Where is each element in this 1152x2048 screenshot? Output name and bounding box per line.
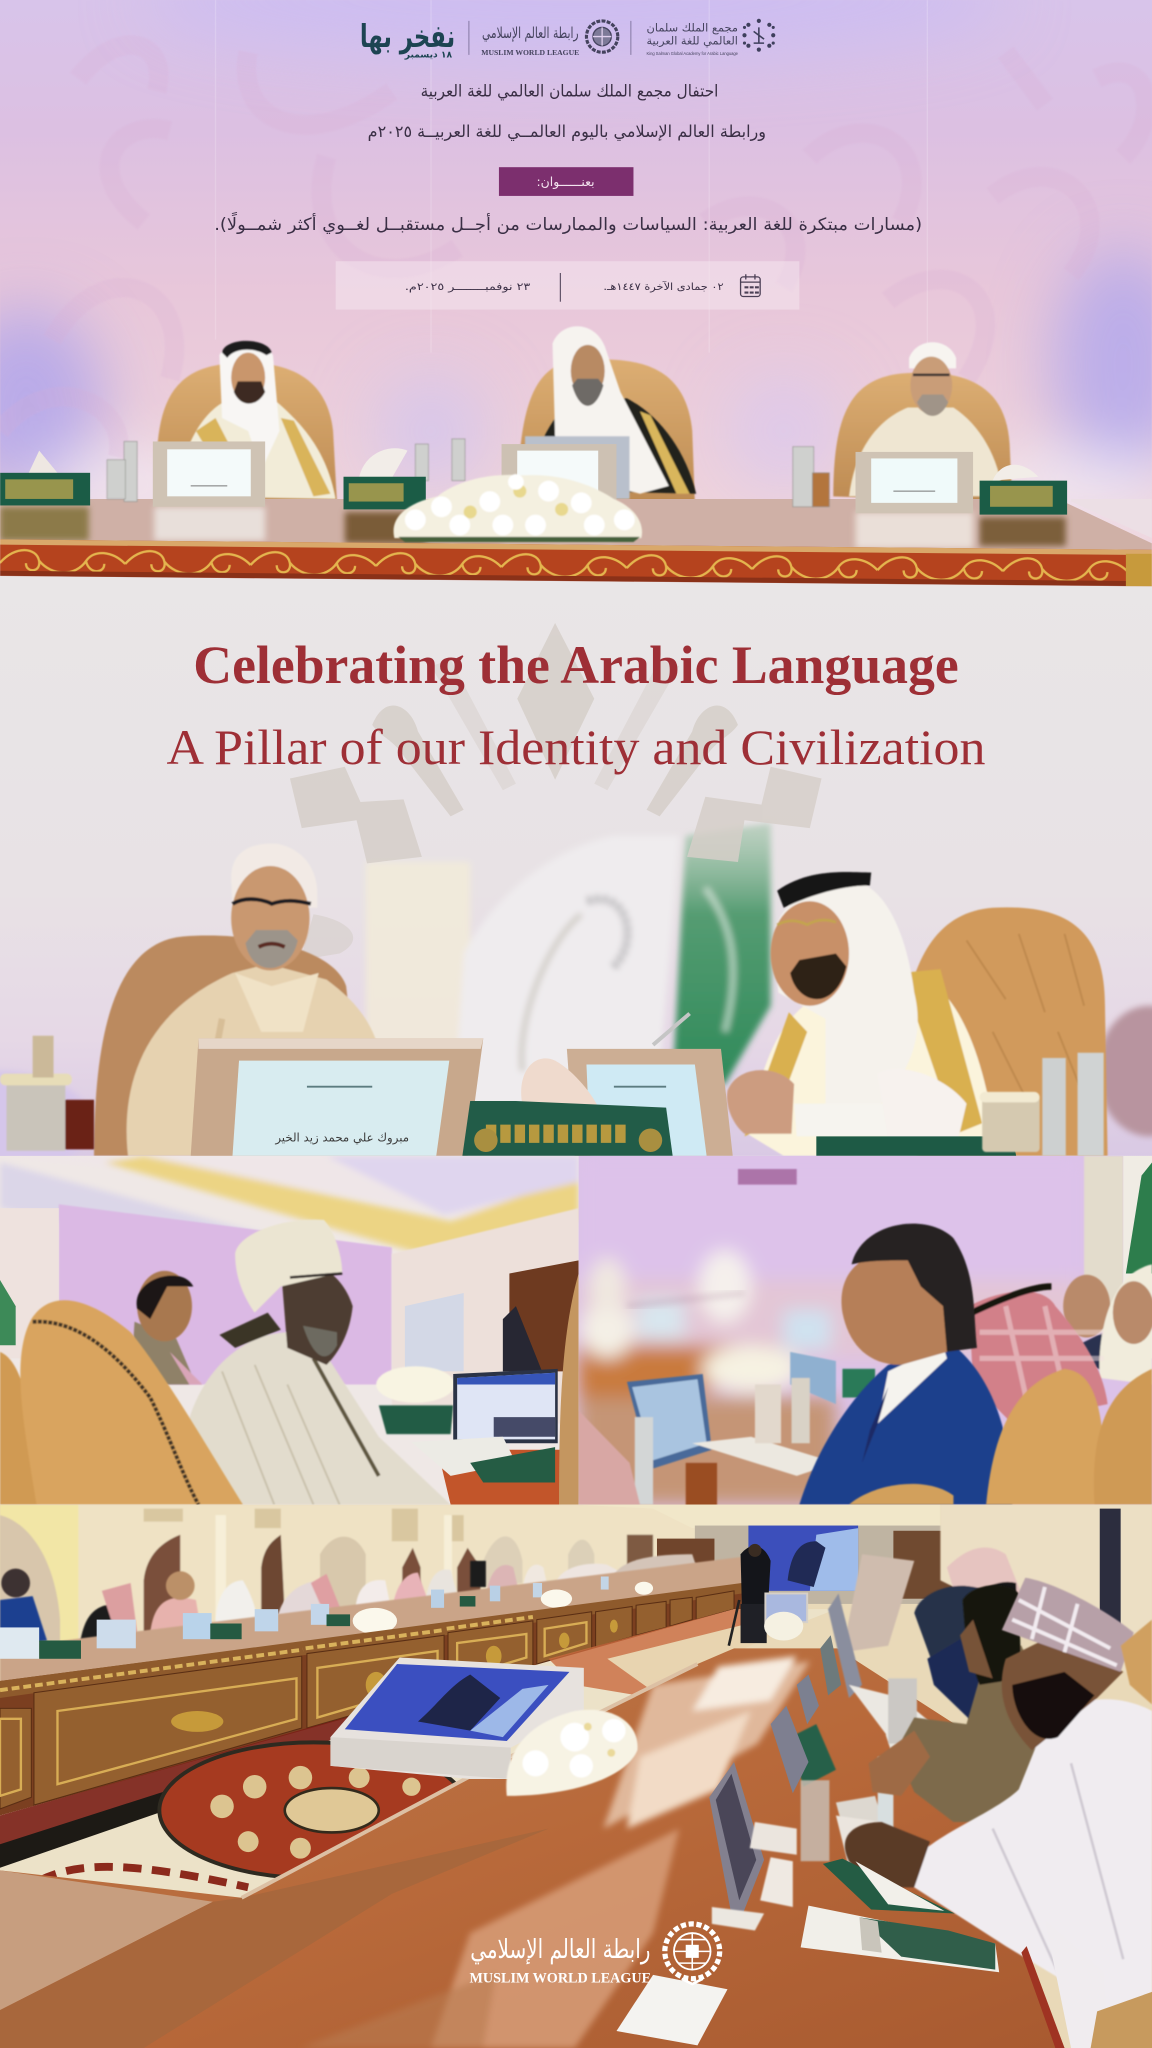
left delegates row [0,1554,699,1659]
person: man in olive suit [869,1585,1058,1822]
logo: Muslim World League: MUSLIM WORLD LEAGUE [481,48,579,57]
plaque: right [856,452,973,513]
table top reflection [0,499,1152,552]
emblem: globe and wreath [665,1924,720,1984]
heading: Arabic event line 1: احتفال مجمع الملك سلمان العالمي للغة العربية [421,82,718,102]
logo: Muslim World League [481,21,618,57]
carpet [0,1609,836,1898]
logo: King Salman Academy: مجمع الملك سلمان [647,21,738,34]
panel: title and two speakers [0,623,1152,1156]
printed papers and folder [801,1859,1152,2048]
person: man in blue suit [799,1224,1012,1505]
chairs [156,359,1012,503]
chair: foreground [0,1300,243,1505]
heading: Arabic theme line: (مسارات مبتكرة للغة العربية: السياسات والممارسات من أجــل مستقبــل لغــوي أكثر شمــولًا). [214,212,922,235]
Hijri date: ٠٢ جمادى الآخرة ١٤٤٧هـ. [603,281,724,293]
panel: photo, delegate in blue suit [579,1156,1152,1507]
flower arrangement [394,474,642,542]
tissue box: centre [344,448,426,509]
second screen and flowers [764,1593,807,1640]
logo: King Salman Academy: King Salman Global Academy for Arabic Language [647,51,739,56]
white flower arrangement [506,1710,638,1796]
logos row [360,19,775,60]
tissue box: left [0,451,90,505]
logo: King Salman Academy: العالمي للغة العربية [647,34,738,47]
right wall [940,1505,1152,1685]
foreground conference table [0,1648,1064,2048]
badge: title label: بعنــــــوان: [537,174,595,190]
Arabic league name: رابطة العالم الإسلامي [470,1935,650,1965]
tissue boxes [0,448,1067,515]
heading: Celebrating the Arabic Language: Celebrating the Arabic Language [193,635,959,695]
English league name: MUSLIM WORLD LEAGUE [470,1971,651,1987]
person: centre speaker [525,326,696,499]
logo: Muslim World League white footer [470,1924,720,1987]
flowers and green box [376,1366,455,1434]
heading: Arabic event line 2: ورابطة العالم الإسلامي باليوم العالمــي للغة العربيــة ٢٠٢٥م [368,122,766,142]
tissue box: foreground [462,1058,673,1156]
microphone [653,1014,690,1045]
ceiling [0,1156,579,1273]
table items on right row [790,1593,967,1842]
person: left delegate [176,341,336,499]
table reflections [300,1656,810,2048]
background calligraphy watermark [110,436,126,457]
presentation monitor [330,1657,584,1779]
glassware left [0,1036,94,1151]
side delegates [1063,1264,1152,1384]
person: right delegate [849,342,1003,496]
person: man in white cap and thobe [845,1578,1152,2048]
logo: campaign wordmark: ١٨ ديسمبر [404,50,452,60]
bottles and glasses [107,439,829,507]
logo: campaign wordmark [362,23,454,60]
camera operator [729,1544,771,1646]
subheading: A Pillar of our Identity and Civilization: A Pillar of our Identity and Civilization [167,720,986,775]
backdrop seams [216,0,927,353]
lilac wall [59,1204,392,1384]
plaque: left [153,441,265,507]
row of plaques and boxes [0,1576,653,1659]
person: man in white robe and turban [183,1220,451,1505]
plaque: right foreground [567,1049,733,1156]
carpet medallion [159,1742,468,1878]
tissue box: right [980,465,1067,515]
water glass and cards [712,1780,891,1930]
large video screen [748,1526,858,1591]
panel: stage photograph [0,0,1152,586]
panel: photo, delegate in turban [0,1156,579,1505]
right side crowd [842,1547,1032,1757]
date panel [336,261,799,310]
panel: conference hall photo [0,1505,1152,2048]
plaque: large foreground: مبروك علي محمد زيد الخير [274,1131,409,1146]
person: right speaker with chair [727,872,1108,1156]
blurred backdrop and room [579,1156,1081,1505]
hall walls with arches [0,1505,744,1685]
laptop [453,1369,558,1443]
laptops along the table [709,1635,841,1916]
logo: Muslim World League: رابطة العالم الإسلامي [482,24,579,43]
stage lighting glows [0,0,1152,512]
name plaques [153,441,973,513]
Gregorian date: ٢٣ نوفمبــــــــر ٢٠٢٥م. [405,282,531,293]
blurred laptops and water [579,1352,875,1507]
drapes and flags behind speakers [0,823,1152,1176]
badge: title label [499,167,633,196]
plaque: large foreground [191,1038,483,1156]
white tabletop plate [616,1975,728,2045]
person: left speaker with chair [94,844,392,1156]
red checked headdress person [969,1287,1108,1424]
gold ornaments [171,1620,618,1732]
tissue box: right foreground [816,1136,1016,1156]
logo: King Salman Academy [647,19,775,56]
background emblem watermark [290,623,822,960]
plaque: centre [502,444,616,507]
person: man behind [131,1271,202,1384]
chair back on right edge [559,1273,579,1505]
glassware right [980,1053,1104,1156]
logo: campaign wordmark: نفخر بها [360,19,455,55]
table front panels [0,1583,742,1816]
back wall and ceiling [575,1505,961,1604]
table [438,1450,562,1505]
chairs in foreground [849,1369,1152,1505]
tabletop row [0,1557,742,1682]
ornate table trim [0,539,1152,586]
icon: calendar [741,274,760,296]
